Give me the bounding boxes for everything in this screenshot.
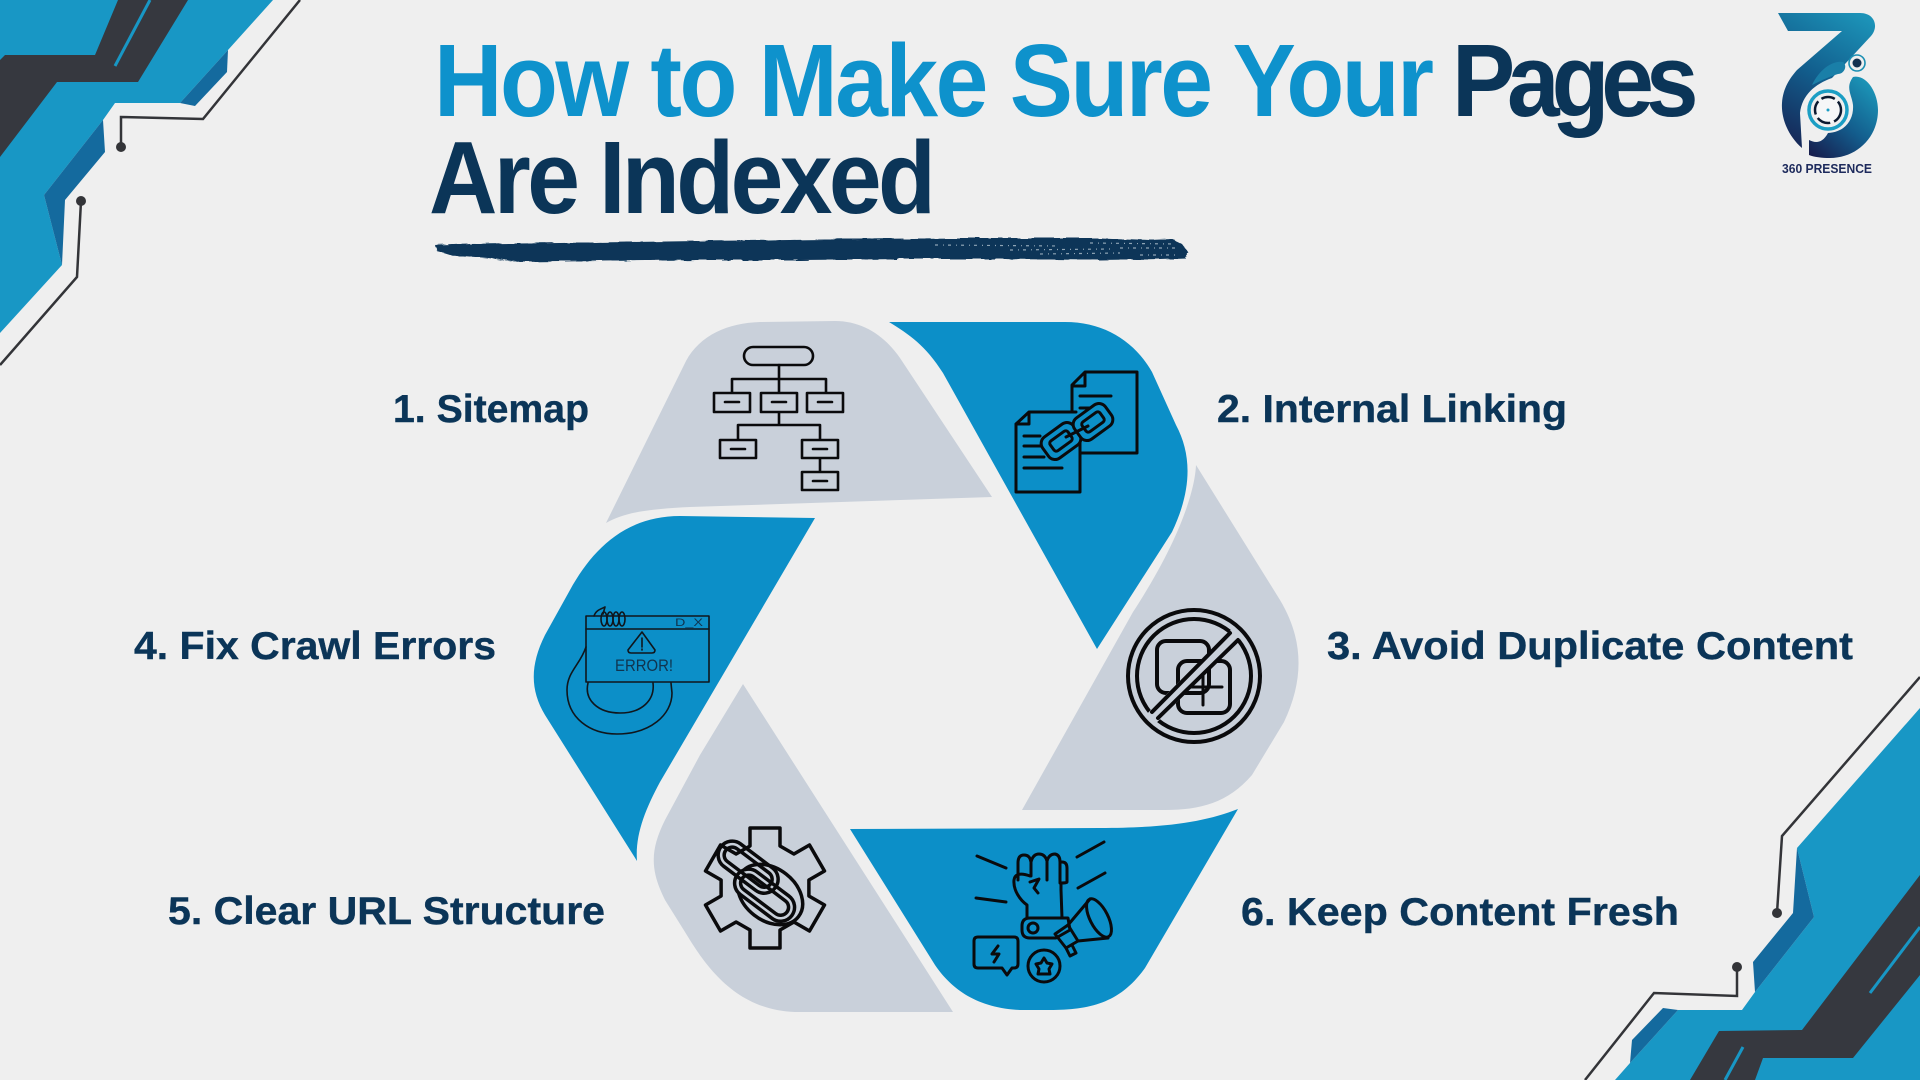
corner decoration: top left [0, 0, 300, 365]
icon: no duplicate content [1128, 610, 1260, 742]
label 2: 2. Internal Linking [1217, 388, 1567, 431]
segment 4: blue [534, 516, 815, 861]
corner decoration: bottom right [1585, 677, 1920, 1080]
window controls text: D_X [675, 617, 704, 629]
label 4: 4. Fix Crawl Errors [134, 625, 496, 668]
icon: gear with chain [705, 828, 824, 948]
logo: 360 Presence [1778, 13, 1878, 176]
title: How to Make Sure Your [434, 22, 1434, 138]
segment 6: blue [850, 809, 1238, 1010]
title underline brush stroke [435, 238, 1188, 262]
icon: fist and megaphone [974, 842, 1117, 982]
segment 3: gray [1022, 465, 1299, 810]
cycle diagram [534, 321, 1299, 1012]
label 3: 3. Avoid Duplicate Content [1327, 625, 1853, 668]
segment 5: gray [654, 684, 953, 1012]
logo wordmark: 360 PRESENCE [1782, 162, 1872, 176]
title: Pages [1452, 22, 1699, 138]
chain link [1038, 400, 1116, 463]
icon: linked documents [1016, 372, 1137, 492]
title: Are Indexed [429, 119, 936, 235]
icon: sitemap [714, 347, 843, 490]
segment 2: blue [889, 322, 1188, 649]
title [429, 22, 1699, 235]
label 1: 1. Sitemap [393, 388, 589, 431]
label 6: 6. Keep Content Fresh [1241, 891, 1679, 934]
segment 1: gray [606, 321, 992, 523]
icon: error window [567, 607, 709, 734]
label 5: 5. Clear URL Structure [168, 890, 605, 933]
error label: ERROR! [615, 656, 673, 675]
